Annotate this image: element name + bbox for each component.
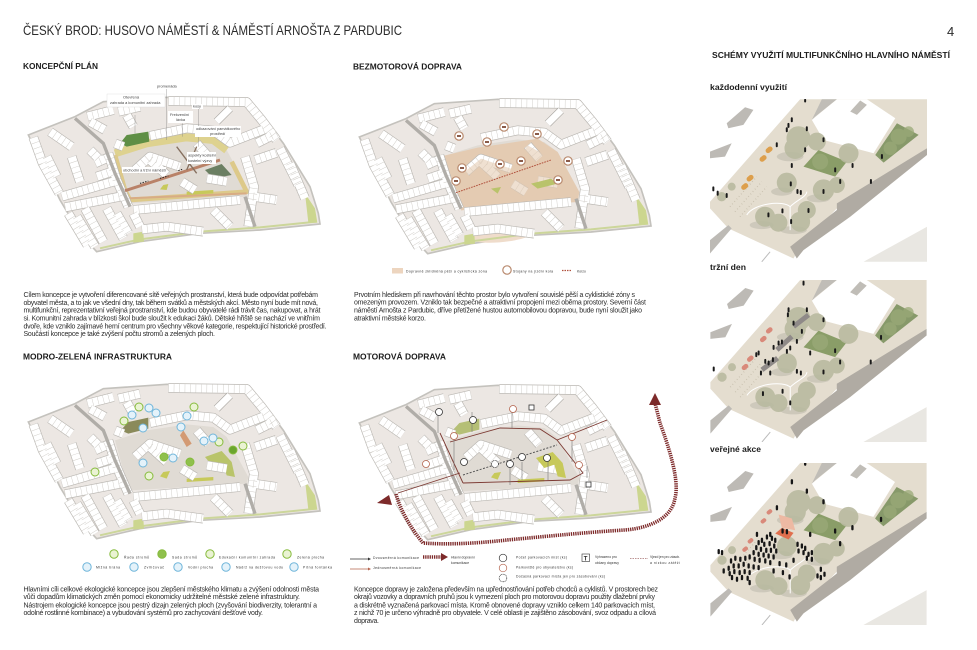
heading: koncepční plán: KONCEPČNÍ PLÁN [23, 60, 98, 71]
aerial: everyday use [710, 99, 927, 262]
legend: infrastructure: Nádrž na dešťovou vodu [236, 566, 283, 570]
panel: schémy využití [710, 49, 951, 625]
text: bezmotorová doprava: omezeným provozem. Vzniklo tak bezpečné a atraktivní propojení mezi oběma prostory. Severní část [354, 300, 646, 307]
legend: motor traffic: Vjezd jen pro zásob. [650, 555, 680, 559]
legend: motor traffic: občany dopravy [595, 561, 619, 565]
text: modro-zelená infrastruktura [24, 586, 319, 617]
panel: motorová doprava [350, 352, 680, 625]
text: koncepční plán: Součástí koncepce je také zvýšení počtu stromů a zelených ploch. [24, 330, 215, 338]
text: motorová doprava: z nichž 70 je určeno výhradně pro obyvatele. V celé oblasti je zajištěno zásobování, svoz odpadu a cílová [354, 610, 656, 617]
text: bezmotorová doprava: náměstí Arnošta z Pardubic, dříve přetížené hustou automobilovou dopravou, bude nyní sloužit jako [354, 308, 642, 314]
page number: 4 [947, 24, 954, 39]
legend: infrastructure: Zvlhčovač [144, 566, 164, 570]
aerial: public events [710, 463, 927, 625]
text: koncepční plán: si. Komunitní zahrada v blízkosti škol bude sloužit k edukaci žáků. Dětské hřiště se nachází ve vnitřním [24, 314, 320, 322]
label: tržní den: tržní den [710, 262, 746, 272]
text: bezmotorová doprava: atraktivní městské korzo. [354, 315, 426, 322]
icons: blue markers [128, 404, 217, 467]
heading: motorová doprava: MOTOROVÁ DOPRAVA [353, 352, 446, 362]
legend: infrastructure: Vodní plocha [188, 566, 213, 570]
legend: motor traffic: Počet parkovacích míst (ks) [516, 556, 567, 560]
text: koncepční plán: dvoře, kde vzniklo zajímavé herní centrum pro všechny věkové kategorie, respektující historické prostředí. [24, 323, 327, 330]
panel: bezmotorová doprava [353, 62, 651, 322]
text: motorová doprava [354, 586, 658, 625]
text: motorová doprava: a diskrétně vyznačená parkovací místa. Kromě obnovené dopravy vzniklo celkem 140 parkovacích míst, [354, 602, 655, 610]
legend: motor traffic: Dvousměrná komunikace [373, 556, 419, 560]
text: koncepční plán: multifunkční, reprezentativní veřejná prostranství, kde budou obyvatelé rádi trávit čas, nakupovat, a hrát [24, 308, 321, 314]
text: motorová doprava: Koncepce dopravy je založena především na upřednostňování potřeb chodců a cyklistů. V prostorech bez [354, 586, 658, 594]
legend: motor traffic: Jednosměrná komunikace [373, 566, 421, 570]
icons: bike stands [452, 123, 572, 185]
text: koncepční plán: obyvatel města, a to jak ve všední dny, tak během svátků a městských akcí. Město nyní bude mít nová, [24, 299, 318, 307]
legend: motor traffic: a nízkou zátěží [650, 561, 680, 565]
heading: modro-zelená infrastruktura: MODRO-ZELENÁ INFRASTRUKTURA [23, 352, 172, 362]
legend: infrastructure: Mlžná brána [96, 566, 120, 570]
legend: pedestrian map: Korzo [577, 269, 586, 273]
map labels: obchodní a tržní náměstí [123, 168, 167, 172]
legend: pedestrian map [392, 266, 586, 274]
legend: motor traffic: T [584, 556, 588, 562]
legend: motor traffic: Parkoviště pro obyvatelstvo (ks) [516, 566, 573, 570]
legend: motor traffic: Dočasná parkovací místa jen pro zásobování (ks) [516, 574, 605, 578]
markers: parking counts [422, 405, 591, 487]
map labels: Otevřená [123, 94, 140, 100]
legend: pedestrian map: Dopravně zklidněná pěší a cyklistická zóna [406, 269, 487, 273]
map labels [107, 83, 241, 173]
legend: pedestrian map: Stojany na jízdní kola [513, 269, 553, 273]
map labels: kosy [193, 104, 201, 108]
map: pedestrian zone [359, 99, 651, 254]
legend: infrastructure: Pitná fontánka [303, 566, 332, 570]
panel: modro-zelená infrastruktura [23, 352, 332, 617]
icons: green markers [91, 403, 247, 480]
heading: bezmotorová doprava: BEZMOTOROVÁ DOPRAVA [353, 62, 462, 72]
roads and routes [398, 410, 607, 493]
panel: koncepční plán [23, 60, 327, 338]
legend: infrastructure: Edukační komunitní zahrada [219, 556, 275, 560]
text: modro-zelená infrastruktura: vůči dopadům klimatických změn pomocí ekonomicky udržitelné městské zelené infrastruktury. [24, 593, 300, 601]
map labels: zahrada a komunitní zahrada [110, 100, 161, 105]
map labels: kostelní výzvy [188, 158, 212, 163]
arrow: main route [377, 393, 676, 544]
heading: schémy využití: SCHÉMY VYUŽITÍ MULTIFUNKČNÍHO HLAVNÍHO NÁMĚSTÍ [712, 49, 951, 60]
text: modro-zelená infrastruktura: Hlavními cíli celkové ekologické koncepce jsou zlepšení městského klimatu a zvýšení odolnosti města [24, 586, 319, 594]
map labels: promenáda [157, 84, 178, 88]
legend: infrastructure: Sada stromů [172, 556, 197, 560]
label: veřejné akce: veřejné akce [710, 444, 761, 454]
legend: motor traffic [350, 553, 680, 582]
map: motor traffic [359, 385, 651, 540]
label: každodenní využití: každodenní využití [710, 82, 788, 92]
map labels: Frekvenční [170, 112, 190, 117]
legend: infrastructure: Zelená plocha [297, 556, 324, 560]
legend: infrastructure [83, 550, 332, 571]
text: koncepční plán [24, 292, 327, 338]
text: koncepční plán: Cílem koncepce je vytvoření diferencované sítě veřejných prostranství, která bude odpovídat potřebám [24, 292, 318, 299]
map: blue-green infrastructure [28, 384, 320, 539]
text: bezmotorová doprava [354, 292, 646, 322]
legend: infrastructure: Řada stromů [124, 554, 149, 560]
text: motorová doprava: okrajů vozovky a dopravních pruhů jsou k vymezení ploch pro motorovou dopravu použity dlažební prvky [354, 593, 656, 601]
legend: motor traffic: Vyhrazeno pro [595, 555, 617, 559]
legend: motor traffic: Hlavní dopravní [451, 556, 475, 560]
map: concept plan [28, 88, 320, 252]
map labels: odkazování památkového [196, 126, 240, 131]
text: modro-zelená infrastruktura: Nástrojem ekologické koncepce jsou pestrý dizajn zelených ploch (zvyšování biodiverzity, tolerantní a [24, 602, 317, 610]
text: bezmotorová doprava: Prvotním hlediskem při navrhování těchto prostor bylo vytvoření souvislé pěší a cyklistické zóny s [354, 292, 636, 299]
map labels: aspekty kostelní [188, 152, 217, 158]
text: modro-zelená infrastruktura: odolné rostlinné kombinace) a vybudování systémů pro zachycování dešťové vody. [24, 609, 263, 617]
text: motorová doprava: doprava. [354, 618, 379, 625]
title: ČESKÝ BROD: HUSOVO NÁMĚSTÍ & NÁMĚSTÍ ARNOŠTA Z PARDUBIC [23, 22, 402, 38]
map labels: prostředí [210, 131, 226, 136]
legend: motor traffic: komunikace [451, 561, 469, 565]
aerial: market day [710, 280, 927, 442]
map labels: lávka [176, 117, 186, 122]
